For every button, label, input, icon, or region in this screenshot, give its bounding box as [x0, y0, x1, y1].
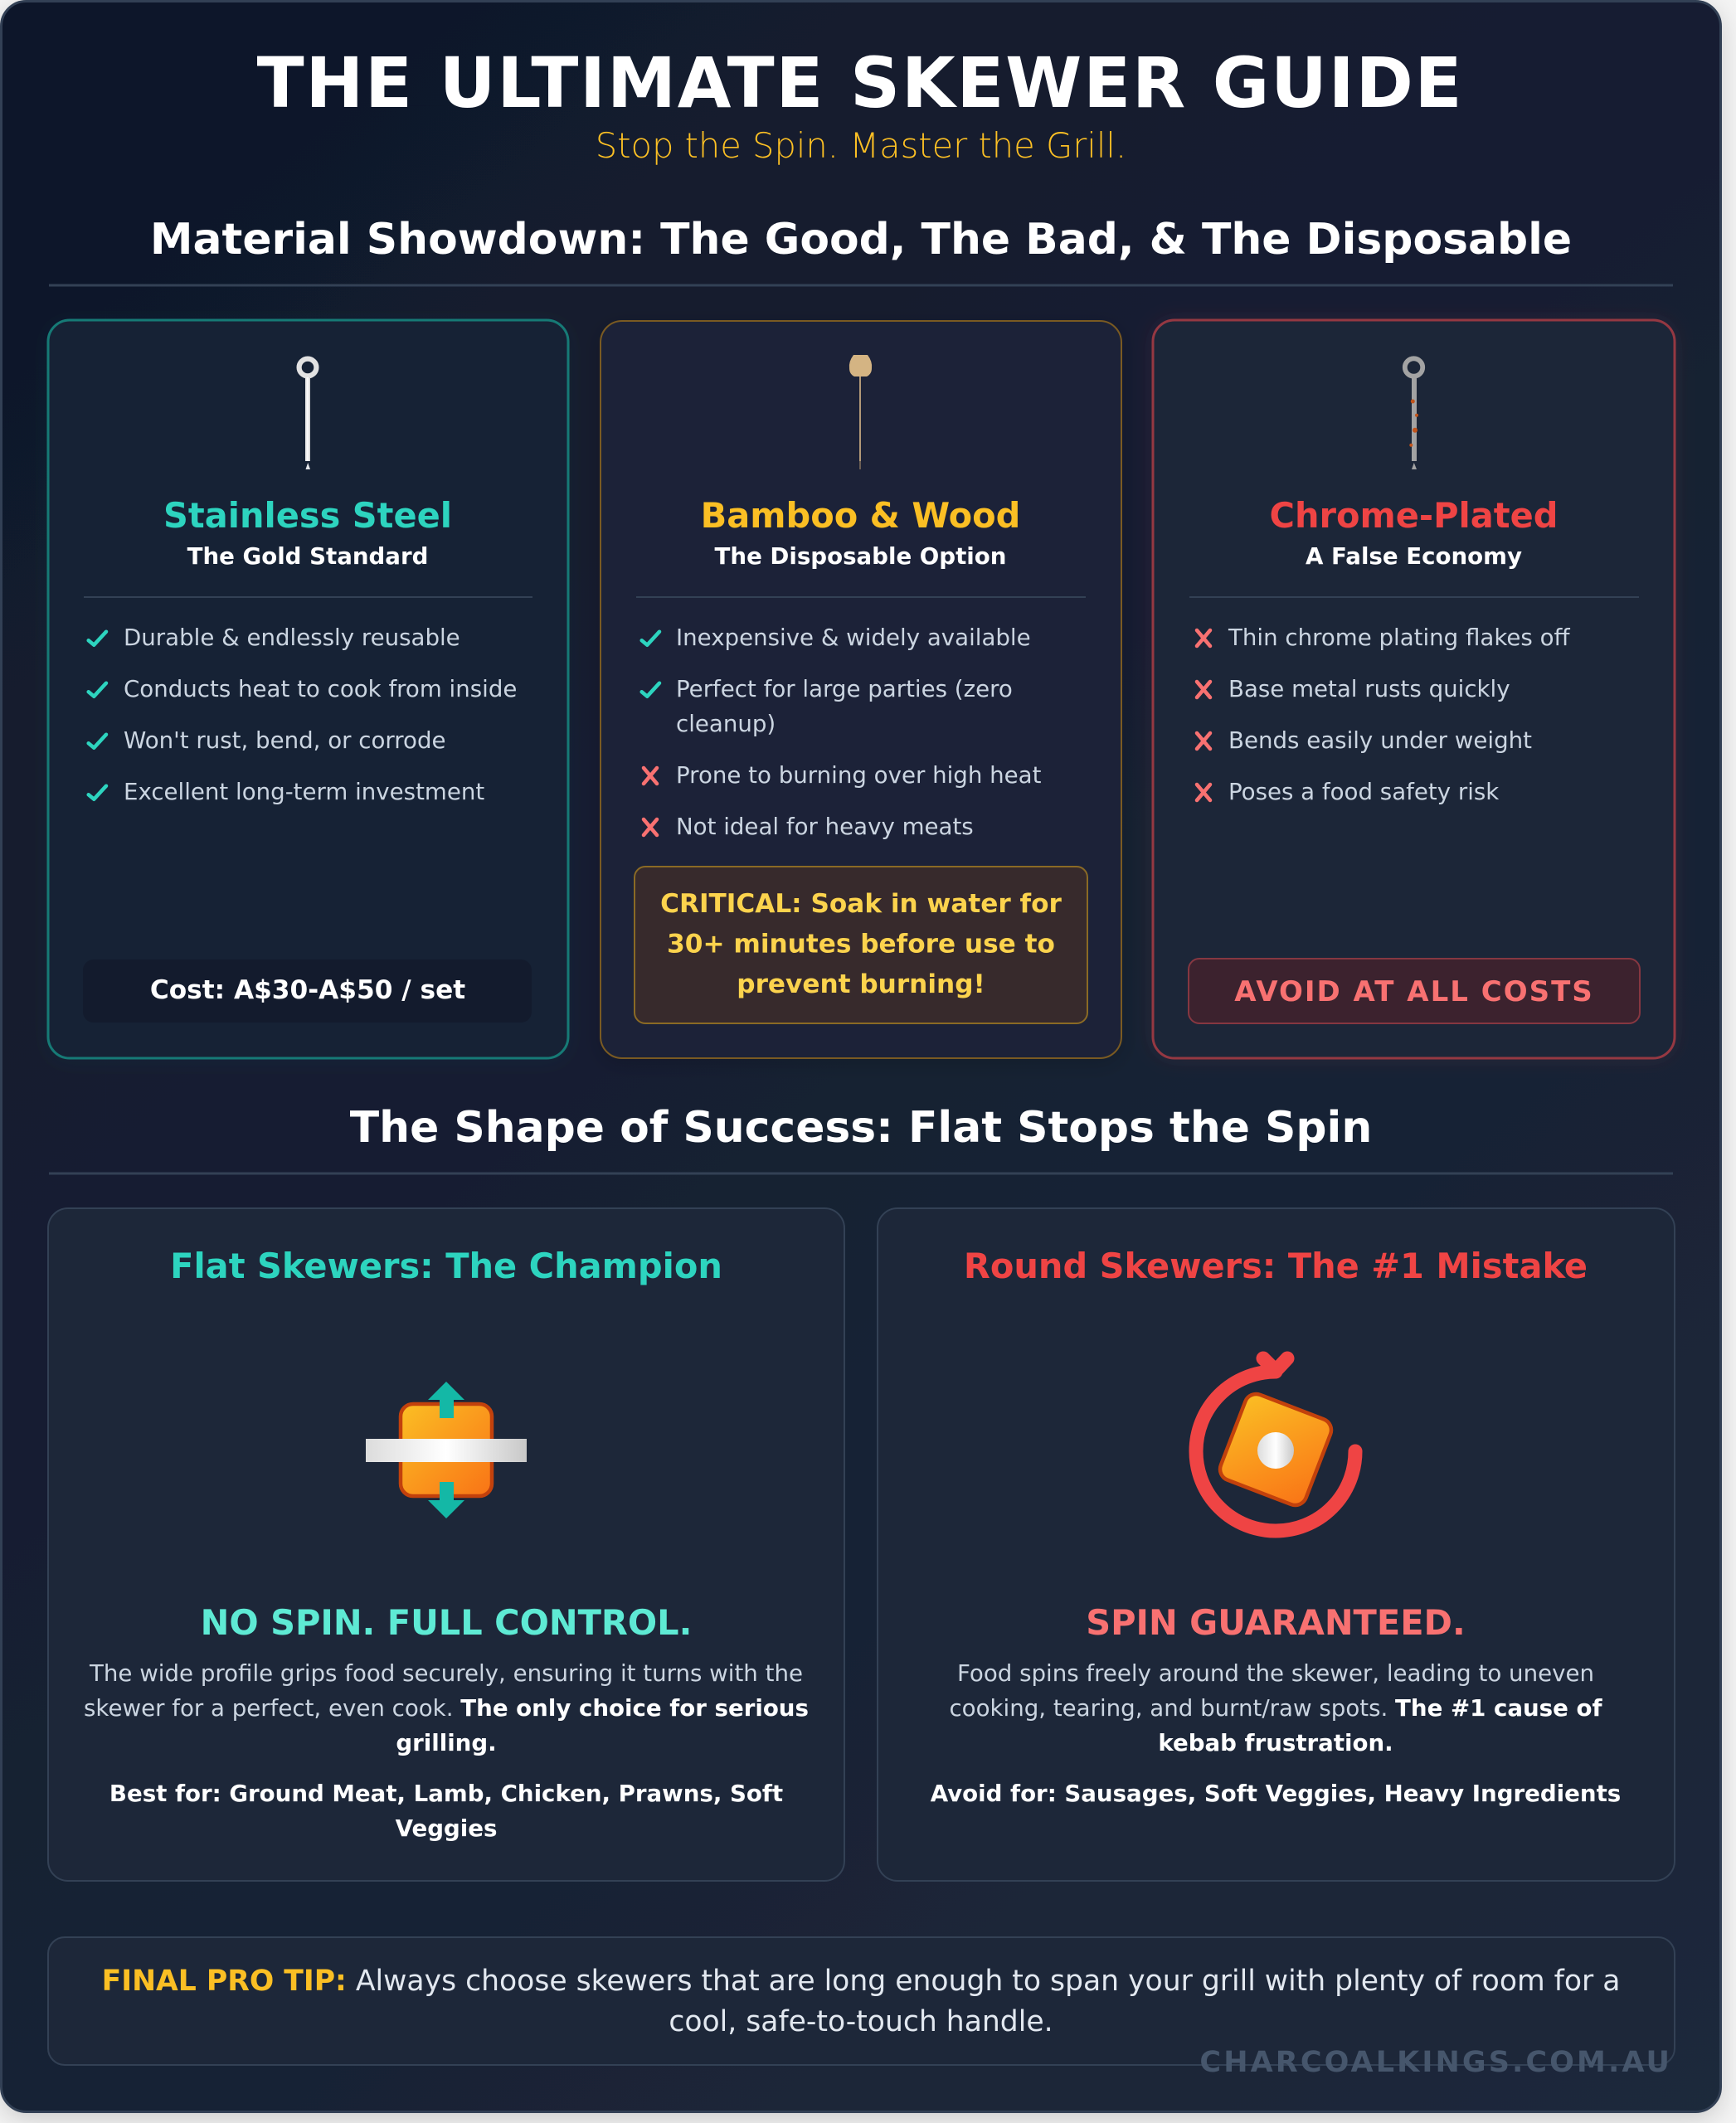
- panel: chrome-plated: [1153, 320, 1675, 1058]
- cons list: Poses a food safety risk: [1228, 778, 1499, 805]
- final pro tip: cool, safe-to-touch handle.: [669, 2005, 1053, 2038]
- cost box: Cost: A$30-A$50 / set: [150, 975, 465, 1005]
- pros and cons list: [642, 624, 1042, 840]
- subheading: The Gold Standard: [187, 542, 428, 570]
- icon: round skewer spinning: [1196, 1358, 1355, 1531]
- description: The wide profile grips food securely, ensuring it turns with the: [89, 1659, 803, 1687]
- title: THE ULTIMATE SKEWER GUIDE: [257, 42, 1463, 124]
- icon: chrome skewer with rust: [1405, 358, 1422, 469]
- section heading: shape of success: The Shape of Success: Flat Stops the Spin: [350, 1103, 1372, 1153]
- cons list: [1197, 624, 1570, 805]
- critical warning box: prevent burning!: [737, 969, 985, 999]
- pros list: Won't rust, bend, or corrode: [124, 726, 446, 754]
- pros and cons list: Perfect for large parties (zero: [676, 675, 1013, 702]
- critical warning box: CRITICAL: Soak in water for: [660, 889, 1062, 919]
- heading: round skewers: Round Skewers: The #1 Mistake: [964, 1246, 1588, 1286]
- description: [84, 1659, 809, 1756]
- final pro tip: [48, 1937, 1675, 2065]
- description: Food spins freely around the skewer, leading to uneven: [957, 1659, 1594, 1687]
- best for: Best for: Ground Meat, Lamb, Chicken, Prawns, Soft: [109, 1780, 783, 1807]
- pros and cons list: Not ideal for heavy meats: [676, 813, 974, 840]
- avoid box: [1189, 959, 1640, 1023]
- pros list: Excellent long-term investment: [124, 778, 484, 805]
- avoid for: Avoid for: Sausages, Soft Veggies, Heavy Ingredients: [931, 1780, 1621, 1807]
- panel: stainless steel: [48, 320, 568, 1058]
- cons list: Base metal rusts quickly: [1228, 675, 1510, 702]
- watermark: CHARCOALKINGS.COM.AU: [1199, 2046, 1672, 2079]
- best for: Veggies: [396, 1815, 497, 1842]
- subtitle: Stop the Spin. Master the Grill.: [596, 125, 1126, 166]
- pros and cons list: Prone to burning over high heat: [676, 761, 1042, 789]
- avoid box: AVOID AT ALL COSTS: [1234, 975, 1594, 1008]
- section heading: material showdown: Material Showdown: The Good, The Bad, & The Disposable: [150, 215, 1572, 265]
- pros and cons list: Inexpensive & widely available: [676, 624, 1031, 651]
- final pro tip: FINAL PRO TIP: Always choose skewers that are long enough to span your grill with plenty of room for a: [102, 1965, 1620, 1998]
- best for: [109, 1780, 783, 1842]
- cons list: Bends easily under weight: [1228, 726, 1532, 754]
- pros list: [89, 624, 517, 805]
- description: kebab frustration.: [1158, 1729, 1393, 1756]
- pros and cons list: cleanup): [676, 710, 776, 737]
- cons list: Thin chrome plating flakes off: [1228, 624, 1570, 651]
- icon: bamboo skewer: [849, 355, 872, 469]
- subheading: A False Economy: [1306, 542, 1522, 570]
- heading: bamboo and wood: Bamboo & Wood: [701, 495, 1020, 536]
- description: [949, 1659, 1602, 1756]
- heading: flat skewers: Flat Skewers: The Champion: [170, 1246, 722, 1286]
- icon: flat skewer with food and arrows: [366, 1382, 527, 1518]
- critical warning box: [635, 867, 1087, 1023]
- subheading: The Disposable Option: [715, 542, 1006, 570]
- description: skewer for a perfect, even cook. The only choice for serious: [84, 1694, 809, 1722]
- slogan: spin guaranteed: SPIN GUARANTEED.: [1086, 1602, 1466, 1643]
- header: [257, 42, 1463, 166]
- slogan: no spin: NO SPIN. FULL CONTROL.: [201, 1602, 692, 1643]
- pros list: Conducts heat to cook from inside: [124, 675, 517, 702]
- heading: chrome-plated: Chrome-Plated: [1270, 495, 1558, 536]
- panel: round skewers: [878, 1208, 1675, 1881]
- description: grilling.: [396, 1729, 497, 1756]
- cost box: [83, 959, 532, 1023]
- panel: bamboo and wood: [601, 321, 1121, 1058]
- icon: stainless steel skewer: [299, 359, 316, 469]
- critical warning box: 30+ minutes before use to: [667, 929, 1055, 959]
- heading: stainless steel: Stainless Steel: [163, 495, 452, 536]
- pros list: Durable & endlessly reusable: [124, 624, 460, 651]
- panel: flat skewers: [48, 1208, 844, 1881]
- description: cooking, tearing, and burnt/raw spots. The #1 cause of: [949, 1694, 1602, 1722]
